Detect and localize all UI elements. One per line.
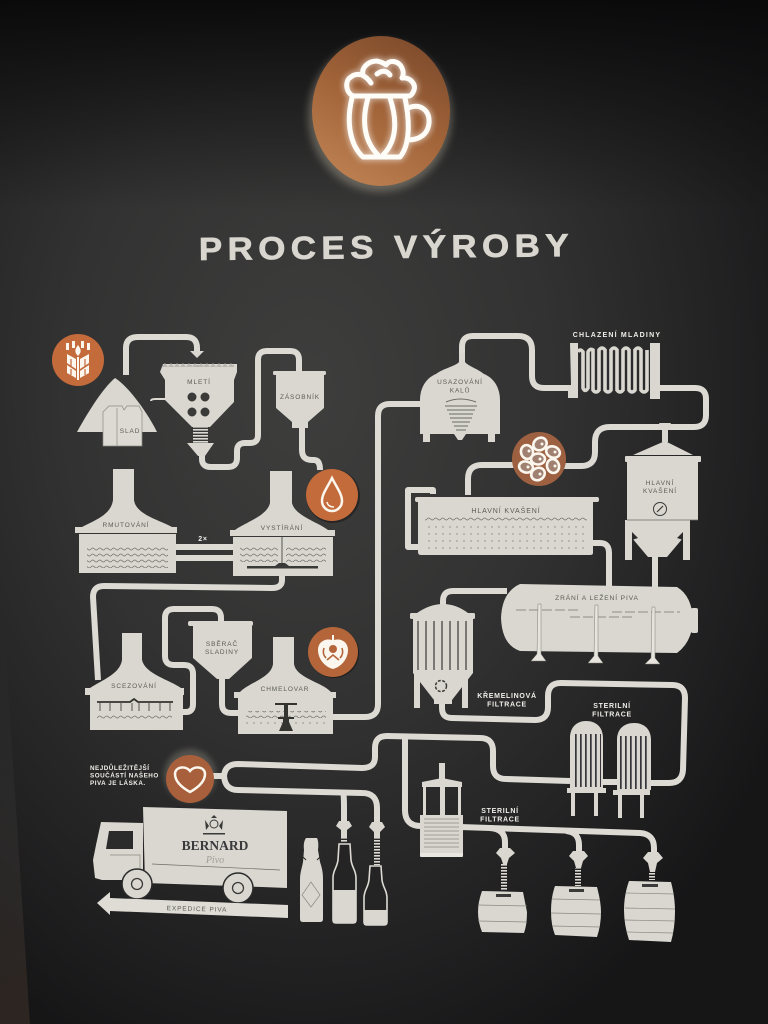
label: chlazeni mladiny: CHLAZENÍ MLADINY <box>573 330 661 339</box>
swing-top bottle <box>300 838 323 922</box>
mleti: mill hopper: MLETÍ <box>187 377 211 386</box>
bottle half full <box>333 844 356 923</box>
delivery truck <box>93 807 287 903</box>
label: sterilni filtrace upper: FILTRACE <box>592 712 632 718</box>
keg fillers <box>496 848 663 890</box>
zasobnik: storage hopper <box>273 371 326 428</box>
text: love note: PIVA JE LÁSKA. <box>90 778 146 787</box>
label: sterilni filtrace lower: FILTRACE <box>480 816 520 824</box>
icon: yeast badge <box>512 432 566 486</box>
icon: hop badge <box>308 627 359 678</box>
sberac sladiny: wort collector <box>188 621 253 679</box>
hlavni kvaseni: closed fermenter <box>625 423 701 560</box>
title: PROCES VÝROBY <box>199 227 574 268</box>
slad: malt heap and sacks: SLAD <box>120 428 140 435</box>
sberac sladiny: wort collector: SBĚRAČ <box>206 639 238 648</box>
label: kremelinova filtrace: KŘEMELINOVÁ <box>477 691 537 700</box>
arrow: expedice piva: EXPEDICE PIVA <box>167 905 227 914</box>
arrow: expedice piva <box>97 892 288 918</box>
usazovani kalu: whirlpool <box>420 353 500 442</box>
sterile filter cartridges <box>567 721 651 818</box>
mleti: mill hopper <box>151 362 237 456</box>
zasobnik: storage hopper: ZÁSOBNÍK <box>280 392 320 401</box>
hlavni kvaseni: open fermenter: HLAVNÍ KVAŠENÍ <box>471 506 541 515</box>
cooler coil <box>568 343 660 399</box>
vystirani: lauter kettle <box>230 471 335 576</box>
vystirani: lauter kettle: VYSTÍRÁNÍ <box>261 523 303 532</box>
bottle nearly empty <box>364 866 387 925</box>
hlavni kvaseni: closed fermenter: KVAŠENÍ <box>643 486 677 495</box>
zrani a lezeni piva: lagering tank: ZRÁNÍ A LEŽENÍ PIVA <box>555 593 639 602</box>
pipes: packaging <box>213 736 654 852</box>
truck cargo box <box>143 807 287 888</box>
pipes: left side <box>93 337 420 717</box>
icon: water drop badge <box>306 469 360 523</box>
label: sterilni filtrace lower: STERILNÍ <box>481 806 519 815</box>
label: sterilni filtrace upper: STERILNÍ <box>593 701 631 710</box>
bottles <box>300 821 387 925</box>
sberac sladiny: wort collector: SLADINY <box>205 649 239 656</box>
hlavni kvaseni: open fermenter <box>415 497 599 555</box>
filter press <box>420 763 463 857</box>
usazovani kalu: whirlpool: USAZOVÁNÍ <box>437 377 483 386</box>
scezovani: lauter tun <box>85 633 184 730</box>
rmutovani: mash kettle <box>75 469 177 573</box>
delivery truck: BERNARD <box>182 838 249 853</box>
icon: glowing beer mug <box>347 61 429 157</box>
filling nozzles <box>336 821 352 838</box>
kremelinova filtrace: filter tank <box>410 604 475 708</box>
text: 2x: 2× <box>198 536 208 543</box>
chmelovar: hop kettle: CHMELOVAR <box>261 686 309 693</box>
arrowhead into mill <box>190 351 204 358</box>
slad: malt heap and sacks <box>77 378 157 446</box>
mill rollers <box>188 393 209 416</box>
truck cab <box>93 822 143 880</box>
kegs <box>478 881 675 942</box>
rmutovani: mash kettle: RMUTOVÁNÍ <box>103 520 149 529</box>
truck wheels <box>122 869 253 903</box>
logo disc with beer mug <box>308 36 452 192</box>
scezovani: lauter tun: SCEZOVÁNÍ <box>111 681 157 690</box>
usazovani kalu: whirlpool: KALŮ <box>450 386 470 394</box>
icon: heart badge <box>164 749 216 803</box>
crest <box>203 815 225 834</box>
icon: wheat badge <box>52 334 104 386</box>
text: love note: SOUČÁSTÍ NAŠEHO <box>90 770 159 780</box>
delivery truck: Pivo <box>205 855 224 866</box>
pipes: right side <box>408 336 706 783</box>
chmelovar: hop kettle <box>234 637 336 734</box>
text: love note: NEJDŮLEŽITĚJŠÍ <box>90 762 149 772</box>
label: kremelinova filtrace: FILTRACE <box>487 702 527 708</box>
hlavni kvaseni: closed fermenter: HLAVNÍ <box>646 478 674 487</box>
zrani a lezeni piva: lagering tank <box>501 584 698 664</box>
